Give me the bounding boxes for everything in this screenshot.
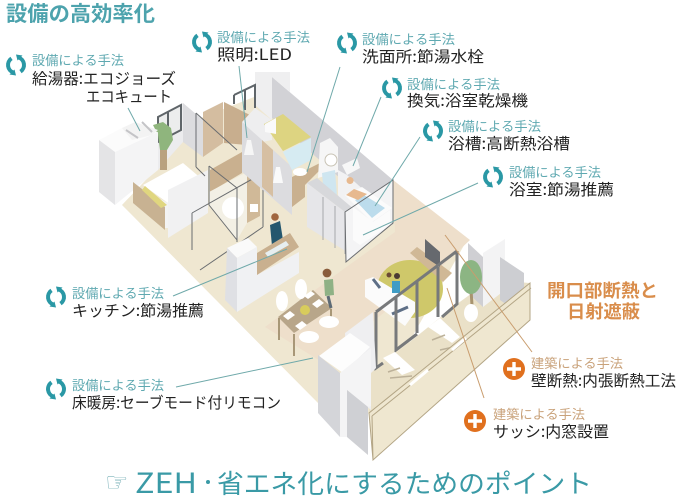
callout: water heater (8, 50, 176, 107)
back bedroom window (158, 105, 181, 142)
plant: bedroom (153, 122, 173, 170)
upper window (234, 85, 255, 110)
callout: ventilation (384, 74, 529, 111)
callout: washroom: 洗面所:節湯水栓 (362, 45, 485, 67)
bedroom bed (133, 163, 203, 230)
callout: water heater: 給湯器:エコジョーズ (32, 67, 176, 89)
ventilation unit (342, 158, 360, 175)
heading: openings insulation: 日射遮蔽 (567, 298, 640, 324)
callout: wall insulation: 建築による手法 (531, 353, 623, 372)
callout: ventilation: 換気:浴室乾燥機 (407, 89, 529, 111)
living room rug zone (265, 180, 470, 362)
central dividing wall (242, 122, 292, 215)
washroom vanity (292, 163, 320, 207)
dining chairs (276, 279, 339, 343)
sofa people (386, 272, 400, 293)
callout: water heater: 設備による手法 (32, 50, 124, 69)
bedroom back wall (183, 103, 203, 157)
bather (346, 177, 367, 200)
callout: window sash (464, 404, 609, 442)
callout: bathroom: 浴室:節湯推薦 (509, 178, 614, 200)
partition wall (168, 170, 208, 238)
bath white wall (338, 170, 375, 212)
closet (203, 102, 272, 157)
callout: floor heating: 床暖房:セーブモード付リモコン (72, 391, 281, 413)
callout: kitchen: 設備による手法 (72, 283, 164, 302)
front white column (318, 312, 376, 455)
callout: bathtub (425, 116, 570, 154)
deck chairs (383, 318, 460, 378)
icon: pointing hand: ☞ (105, 468, 128, 498)
callout: wall insulation: 壁断熱:内張断熱工法 (531, 369, 676, 391)
callout: window sash: サッシ:内窓設置 (493, 420, 609, 442)
leader lines (128, 66, 532, 398)
dining table (278, 290, 332, 356)
callout: lighting (194, 27, 310, 65)
glass frames (192, 113, 263, 270)
tan cabinet (210, 152, 242, 192)
upper right grey wall (272, 77, 393, 225)
right wall segments (468, 239, 524, 317)
kitchen person (270, 213, 283, 246)
balcony parapet (369, 283, 531, 460)
balcony floor (369, 280, 530, 413)
callout: ventilation: 設備による手法 (407, 74, 500, 93)
callout: window sash: 建築による手法 (493, 404, 585, 423)
callout: bathroom: 設備による手法 (509, 162, 601, 181)
bathroom (345, 177, 393, 262)
callout: washroom (339, 29, 485, 67)
shower partition block (307, 178, 355, 257)
callout: bathroom (485, 162, 614, 200)
heading: openings insulation (547, 277, 658, 324)
yellow round rug (377, 260, 443, 318)
heading: openings insulation: 開口部断熱と (547, 277, 658, 303)
callout: floor heating: 設備による手法 (72, 375, 164, 394)
dining person (323, 269, 334, 308)
callout: lighting: 設備による手法 (217, 27, 310, 46)
callout: wall insulation (503, 353, 676, 391)
washroom window (283, 138, 311, 170)
callout: lighting: 照明:LED (217, 43, 292, 65)
left white block (99, 128, 158, 205)
washing machine (318, 138, 338, 178)
floor (122, 90, 467, 425)
callout: bathtub: 浴槽:高断熱浴槽 (448, 132, 570, 154)
water heater unit (122, 122, 158, 140)
upper white wall (255, 72, 290, 120)
sofa (365, 277, 415, 326)
bath blue wall (322, 170, 337, 197)
kitchen block (225, 233, 299, 312)
callout: water heater: エコキュート (86, 85, 172, 107)
callout: bathtub: 設備による手法 (448, 116, 541, 135)
upper bedroom bed (264, 114, 311, 151)
back wall behind window (158, 103, 183, 170)
tv (425, 239, 440, 267)
callout: kitchen (48, 283, 204, 321)
sliding window frame (376, 251, 457, 368)
callout: washroom: 設備による手法 (362, 29, 455, 48)
pendant lamps (244, 140, 283, 183)
callout: floor heating (48, 375, 281, 413)
plant: balcony (460, 260, 482, 322)
toilet room (209, 157, 260, 240)
callout: kitchen: キッチン:節湯推薦 (72, 299, 204, 321)
isometric floor plan illustration (99, 72, 531, 460)
tv stand (410, 247, 452, 282)
